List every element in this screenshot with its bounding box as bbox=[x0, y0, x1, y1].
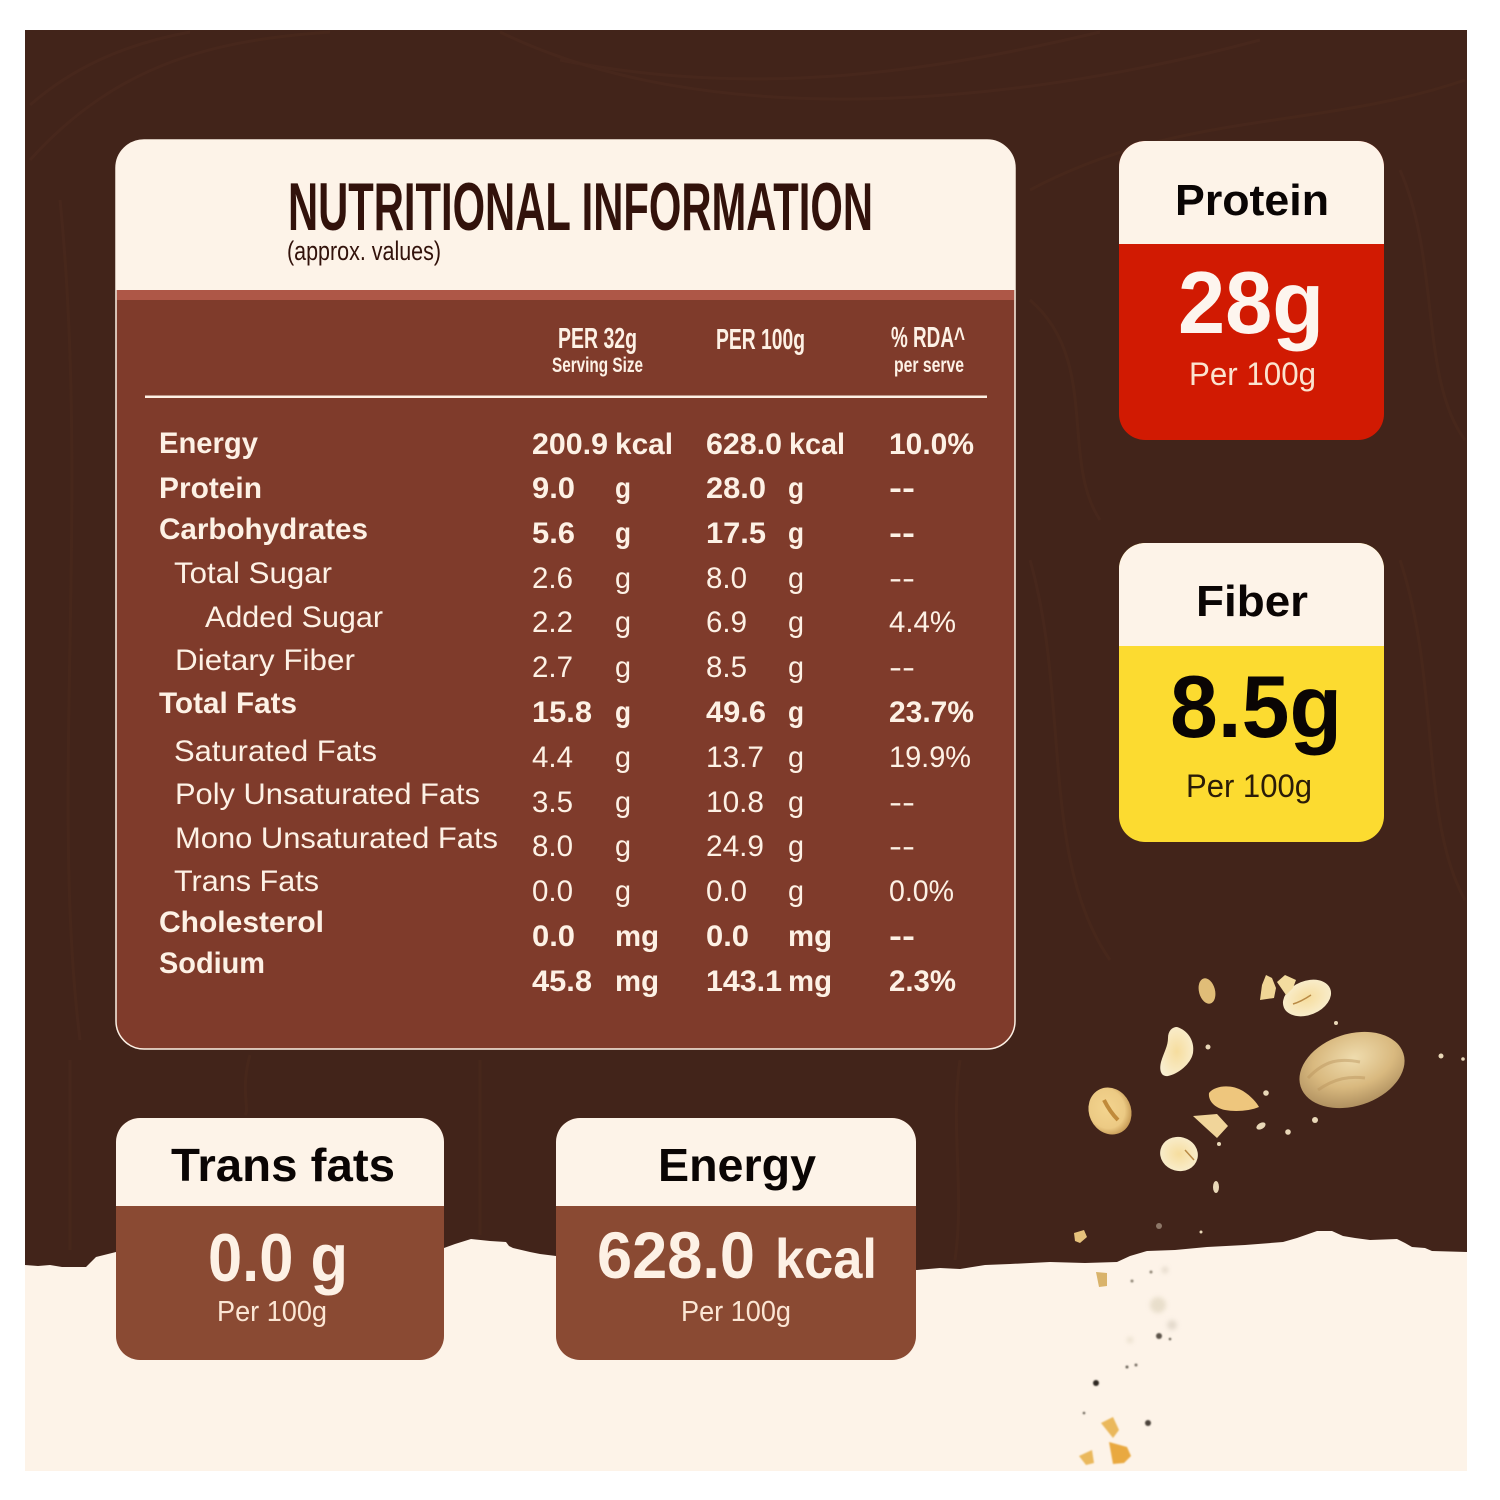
nutrient names: Carbohydrates bbox=[159, 513, 368, 546]
per 100g values: 8.0 bbox=[706, 562, 747, 595]
per 100g values: 49.6 bbox=[706, 696, 766, 729]
nutrient names bbox=[159, 427, 498, 980]
card: protein: Per 100g bbox=[1189, 356, 1316, 392]
RDA values: 10.0% bbox=[889, 428, 974, 461]
RDA values: -- bbox=[889, 651, 915, 684]
title: NUTRITIONAL INFORMATION bbox=[288, 169, 873, 245]
RDA values: -- bbox=[889, 562, 915, 595]
RDA values: 2.3% bbox=[889, 965, 956, 998]
card: energy: Per 100g bbox=[681, 1296, 791, 1328]
per 32g values: 15.8 bbox=[532, 696, 592, 729]
nutrient names: Sodium bbox=[159, 947, 265, 980]
RDA values: 4.4% bbox=[889, 606, 956, 639]
per 100g values: 143.1 bbox=[706, 965, 782, 998]
RDA values: -- bbox=[889, 830, 915, 863]
per 100g values: g bbox=[788, 651, 804, 684]
per 32g values: 8.0 bbox=[532, 830, 573, 863]
column headers: % RDA^ bbox=[891, 322, 965, 354]
card: trans fats bbox=[116, 1118, 444, 1360]
per 32g values: 5.6 bbox=[532, 517, 575, 550]
card: protein bbox=[1119, 141, 1384, 440]
per 100g values bbox=[706, 428, 845, 998]
per 100g values: g bbox=[788, 606, 804, 639]
background wood-grain texture bbox=[30, 32, 1465, 1260]
per 32g values: 2.6 bbox=[532, 562, 573, 595]
nutrient names: Protein bbox=[159, 472, 262, 505]
card: energy: 628.0 bbox=[597, 1218, 755, 1292]
nutrient names: Poly Unsaturated Fats bbox=[175, 778, 480, 811]
per 32g values: g bbox=[615, 830, 631, 863]
card: trans fats: Trans fats bbox=[171, 1139, 395, 1191]
nutrient names: Trans Fats bbox=[174, 865, 319, 898]
card: fiber: 8.5g bbox=[1170, 657, 1342, 756]
per 100g values: g bbox=[788, 472, 804, 505]
card: fiber: Per 100g bbox=[1186, 768, 1312, 804]
per 32g values: mg bbox=[615, 965, 659, 998]
column headers: Serving Size bbox=[552, 354, 643, 377]
nutrient names: Dietary Fiber bbox=[175, 644, 355, 677]
per 32g values: 9.0 bbox=[532, 472, 575, 505]
per 32g values: g bbox=[615, 562, 631, 595]
per 32g values: 2.7 bbox=[532, 651, 573, 684]
card: energy: Energy bbox=[658, 1139, 816, 1191]
per 100g values: 10.8 bbox=[706, 786, 764, 819]
per 32g values: g bbox=[615, 606, 631, 639]
per 32g values: 2.2 bbox=[532, 606, 573, 639]
per 32g values: 4.4 bbox=[532, 741, 573, 774]
per 32g values: g bbox=[615, 741, 631, 774]
RDA values: 0.0% bbox=[889, 875, 954, 908]
per 32g values bbox=[532, 428, 673, 998]
RDA values: 19.9% bbox=[889, 741, 971, 774]
per 32g values: g bbox=[615, 472, 631, 505]
icon: crumbs on paper bbox=[1079, 1267, 1177, 1465]
per 32g values: g bbox=[615, 786, 631, 819]
per 100g values: g bbox=[788, 562, 804, 595]
card: protein: 28g bbox=[1178, 253, 1324, 352]
per 100g values: mg bbox=[788, 965, 832, 998]
column headers bbox=[552, 322, 965, 377]
per 100g values: 13.7 bbox=[706, 741, 764, 774]
per 100g values: g bbox=[788, 830, 804, 863]
per 32g values: 200.9 bbox=[532, 428, 608, 461]
per 32g values: 3.5 bbox=[532, 786, 573, 819]
RDA values: -- bbox=[889, 472, 915, 505]
per 32g values: g bbox=[615, 696, 631, 729]
torn cream paper bottom bbox=[25, 1231, 1467, 1471]
per 32g values: g bbox=[615, 517, 631, 550]
per 32g values: 0.0 bbox=[532, 920, 575, 953]
per 32g values: g bbox=[615, 651, 631, 684]
card: energy: kcal bbox=[775, 1227, 877, 1290]
RDA values bbox=[889, 428, 974, 998]
per 100g values: 8.5 bbox=[706, 651, 747, 684]
card: protein: Protein bbox=[1175, 176, 1329, 225]
nutrient names: Mono Unsaturated Fats bbox=[175, 822, 498, 855]
card: fiber bbox=[1119, 543, 1384, 842]
nutrient names: Total Fats bbox=[159, 687, 297, 720]
nutrient names: Cholesterol bbox=[159, 906, 324, 939]
per 100g values: 0.0 bbox=[706, 875, 747, 908]
per 32g values: kcal bbox=[615, 428, 673, 461]
nutrient names: Added Sugar bbox=[205, 601, 383, 634]
nutrient names: Energy bbox=[159, 427, 258, 460]
per 100g values: g bbox=[788, 517, 804, 550]
per 100g values: g bbox=[788, 741, 804, 774]
RDA values: -- bbox=[889, 786, 915, 819]
per 100g values: 0.0 bbox=[706, 920, 749, 953]
RDA values: -- bbox=[889, 517, 915, 550]
column headers: PER 100g bbox=[716, 324, 805, 356]
column headers: PER 32g bbox=[558, 323, 637, 355]
card: energy bbox=[556, 1118, 916, 1360]
card: fiber: Fiber bbox=[1196, 577, 1308, 626]
per 32g values: 0.0 bbox=[532, 875, 573, 908]
per 100g values: g bbox=[788, 875, 804, 908]
nutrient names: Saturated Fats bbox=[174, 735, 377, 768]
per 32g values: 45.8 bbox=[532, 965, 592, 998]
icon: falling peanuts bbox=[1074, 973, 1465, 1243]
panel: nutritional information bbox=[116, 140, 1015, 1049]
per 100g values: 628.0 bbox=[706, 428, 782, 461]
RDA values: 23.7% bbox=[889, 696, 974, 729]
column headers: per serve bbox=[894, 354, 964, 377]
per 32g values: g bbox=[615, 875, 631, 908]
per 100g values: 28.0 bbox=[706, 472, 766, 505]
per 100g values: mg bbox=[788, 920, 832, 953]
nutrient names: Total Sugar bbox=[174, 557, 332, 590]
per 100g values: 17.5 bbox=[706, 517, 766, 550]
per 100g values: kcal bbox=[789, 428, 845, 461]
per 32g values: mg bbox=[615, 920, 659, 953]
per 100g values: 6.9 bbox=[706, 606, 747, 639]
card: trans fats: Per 100g bbox=[217, 1296, 327, 1328]
RDA values: -- bbox=[889, 920, 915, 953]
per 100g values: g bbox=[788, 696, 804, 729]
card: trans fats: 0.0 g bbox=[208, 1220, 348, 1296]
per 100g values: 24.9 bbox=[706, 830, 764, 863]
subtitle: (approx. values) bbox=[287, 236, 441, 266]
per 100g values: g bbox=[788, 786, 804, 819]
